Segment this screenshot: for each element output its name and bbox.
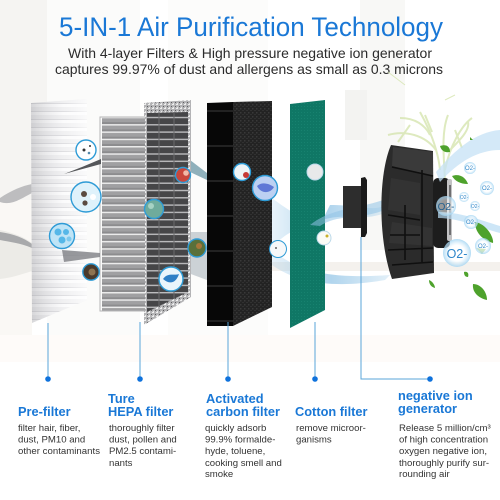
label: activated carbon filter: carbon filter [206, 404, 280, 419]
O2- large: O2- [447, 247, 467, 261]
plant [388, 72, 472, 185]
bubble: green pollen [188, 239, 206, 257]
bubble: red and white [234, 164, 250, 180]
negative ion generator [343, 177, 367, 237]
air streams through carbon and cotton [272, 198, 390, 284]
label: HEPA filter: PM2.5 contami- [109, 446, 176, 457]
panel: activated carbon filter [207, 101, 272, 326]
label: cotton filter: remove microor- [296, 423, 366, 434]
bubble: blue fibers [159, 267, 183, 291]
pollutant bubbles [50, 140, 331, 291]
subtitle: With 4-layer Filters & High pressure negative ion generator [68, 45, 432, 61]
oxygen ion bubbles [436, 162, 494, 267]
label: HEPA filter: Ture [108, 391, 135, 406]
O2- small group [459, 162, 494, 254]
label: cotton filter: ganisms [296, 434, 332, 446]
bubble: dust [76, 140, 96, 160]
bubble: brown particles [83, 264, 99, 280]
label: cotton filter [295, 404, 368, 446]
label: HEPA filter: HEPA filter [108, 404, 173, 419]
label: pre-filter: Pre-filter [18, 404, 71, 419]
label: negative ion generator: rounding air [399, 469, 450, 480]
bubble: gray on cotton [307, 164, 323, 180]
label: HEPA filter [108, 391, 177, 469]
label: activated carbon filter: smoke [205, 469, 233, 480]
O2- medium: O2- [438, 202, 454, 213]
callout line: HEPA filter [137, 322, 143, 382]
bubble: blue cell [252, 176, 278, 200]
O2- small group: O2- [482, 186, 492, 192]
label: pre-filter: dust, PM10 and [18, 434, 85, 446]
outgoing air swoosh [436, 130, 500, 233]
label: cotton filter: Cotton filter [295, 404, 368, 419]
label: HEPA filter: nants [109, 458, 133, 469]
panel: HEPA filter [62, 100, 191, 325]
label: activated carbon filter: Activated [206, 391, 264, 406]
bubble: teal mold [144, 200, 164, 218]
label: HEPA filter: dust, pollen and [109, 434, 177, 446]
label: negative ion generator: oxygen negative ion, [399, 446, 487, 457]
callout line: pre-filter [45, 323, 51, 382]
cross-stream over cotton [310, 195, 395, 226]
label: negative ion generator: of high concentration [399, 434, 488, 446]
callout line: cotton filter [312, 322, 318, 382]
subtitle [55, 45, 443, 77]
O2- small group: O2- [471, 204, 479, 210]
label: pre-filter [18, 404, 100, 457]
label: negative ion generator: Release 5 million/cm³ [399, 423, 491, 434]
leaves [429, 137, 493, 300]
callout line: carbon filter [225, 322, 231, 382]
O2- small group: O2- [466, 220, 476, 226]
label: activated carbon filter: 99.9% formalde- [205, 434, 275, 446]
label: activated carbon filter: hyde, toluene, [205, 446, 265, 457]
panel: cotton filter [290, 100, 325, 328]
fan [381, 145, 452, 279]
O2- small group: O2- [478, 244, 488, 250]
label: activated carbon filter: cooking smell and [205, 458, 282, 469]
label: negative ion generator [398, 388, 491, 480]
bubble: hair and fiber [71, 182, 101, 212]
title: 5-IN-1 Air Purification Technology [59, 12, 444, 42]
bubble: allergens [50, 224, 74, 248]
O2- small group: O2- [460, 195, 468, 201]
callout line: negative ion generator [361, 237, 433, 382]
panel: pre-filter [31, 99, 87, 323]
label: pre-filter: other contaminants [18, 446, 100, 457]
bubble: white speck [270, 240, 286, 258]
label: pre-filter: filter hair, fiber, [18, 423, 80, 434]
label: activated carbon filter: quickly adsorb [205, 423, 266, 434]
air tubes [0, 160, 207, 280]
subtitle: captures 99.97% of dust and allergens as small as 0.3 microns [55, 61, 443, 77]
bubble: red bacteria [176, 168, 190, 182]
label: negative ion generator: negative ion [398, 388, 473, 403]
O2- small group: O2- [465, 166, 475, 172]
bubble: yellow speck [317, 231, 331, 245]
label: activated carbon filter [205, 391, 282, 480]
label: negative ion generator: generator [398, 401, 457, 416]
label: HEPA filter: thoroughly filter [109, 423, 175, 434]
label: negative ion generator: thoroughly purify sur- [399, 458, 489, 469]
